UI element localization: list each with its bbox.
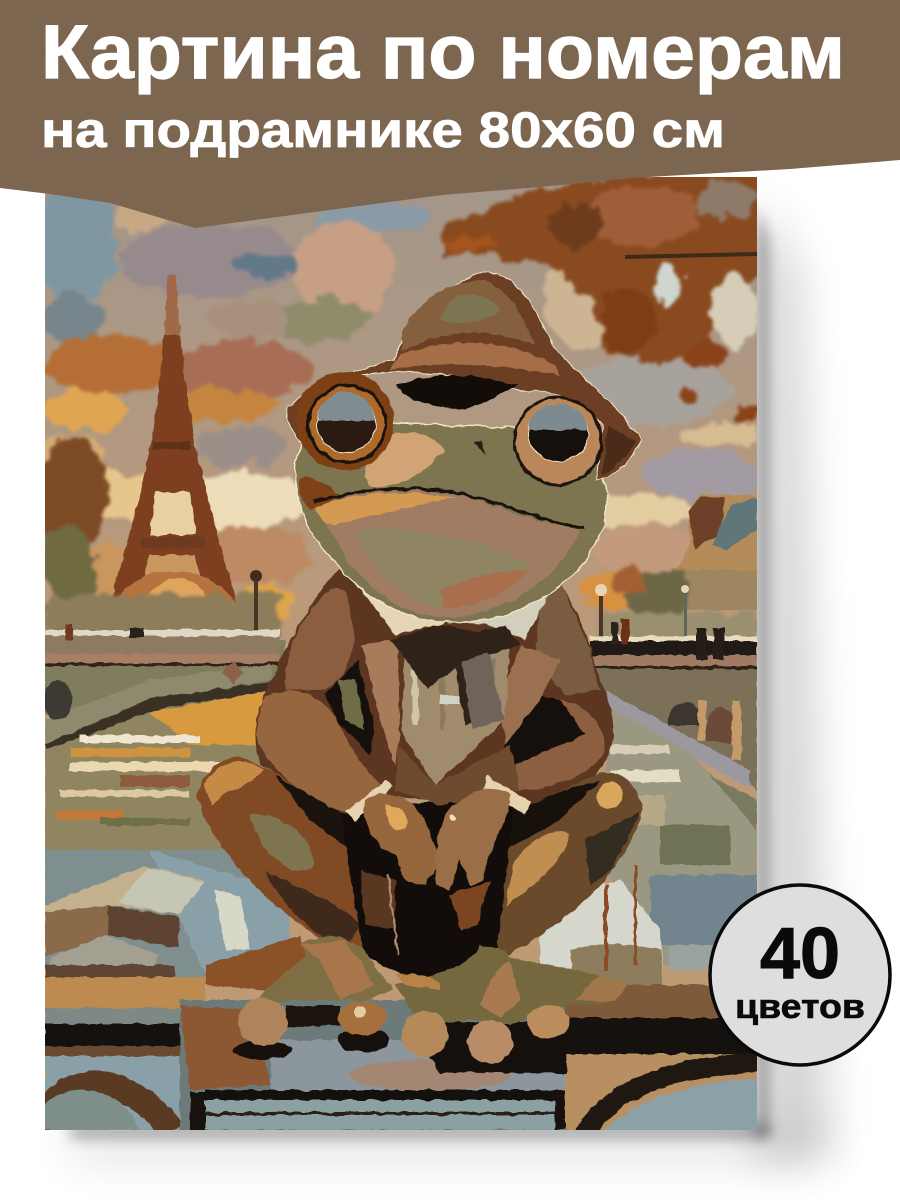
- frog figure: [197, 272, 642, 1073]
- brown header banner: [0, 0, 900, 228]
- left foot: [205, 935, 393, 1059]
- hat: [287, 272, 642, 480]
- left tree and park: [38, 435, 280, 637]
- badge: 40 colours: 40: [760, 914, 840, 994]
- riverside trees and street lamps: [250, 565, 757, 642]
- left eye: [296, 372, 394, 470]
- sky clouds: [33, 185, 760, 623]
- trousers inset: [360, 870, 490, 955]
- dark lap: [340, 800, 515, 980]
- city buildings on right bank: [672, 495, 757, 610]
- right leg: [496, 772, 643, 956]
- hands: [365, 789, 510, 890]
- waistcoat and striped shirt: [402, 640, 510, 785]
- bridge right: [590, 618, 757, 830]
- bridge left: [44, 625, 285, 762]
- cuffs: [345, 775, 530, 822]
- badge: 40 colours: цветов: [735, 988, 865, 1026]
- base ground: [45, 177, 757, 1130]
- railing foreground: [40, 977, 770, 1135]
- title: Картина по номерам: [41, 10, 845, 95]
- branch: [625, 254, 757, 257]
- jacket: [255, 562, 614, 815]
- right eye: [513, 396, 603, 486]
- canvas shadow: [70, 195, 830, 1165]
- collar: [362, 590, 550, 640]
- head: [295, 420, 607, 622]
- subtitle: на подрамнике 80х60 см: [41, 102, 725, 158]
- Eiffel tower: [110, 275, 238, 605]
- painting: frog in Paris: [33, 170, 770, 1135]
- autumn tree foliage: [440, 170, 770, 425]
- sailing boat: [540, 865, 662, 985]
- badge: 40 colours: [710, 885, 890, 1065]
- left leg: [196, 756, 364, 949]
- book stalls lower left: [45, 850, 290, 980]
- river water with reflections: [45, 690, 757, 970]
- tie: [390, 625, 520, 728]
- right foot: [395, 945, 628, 1073]
